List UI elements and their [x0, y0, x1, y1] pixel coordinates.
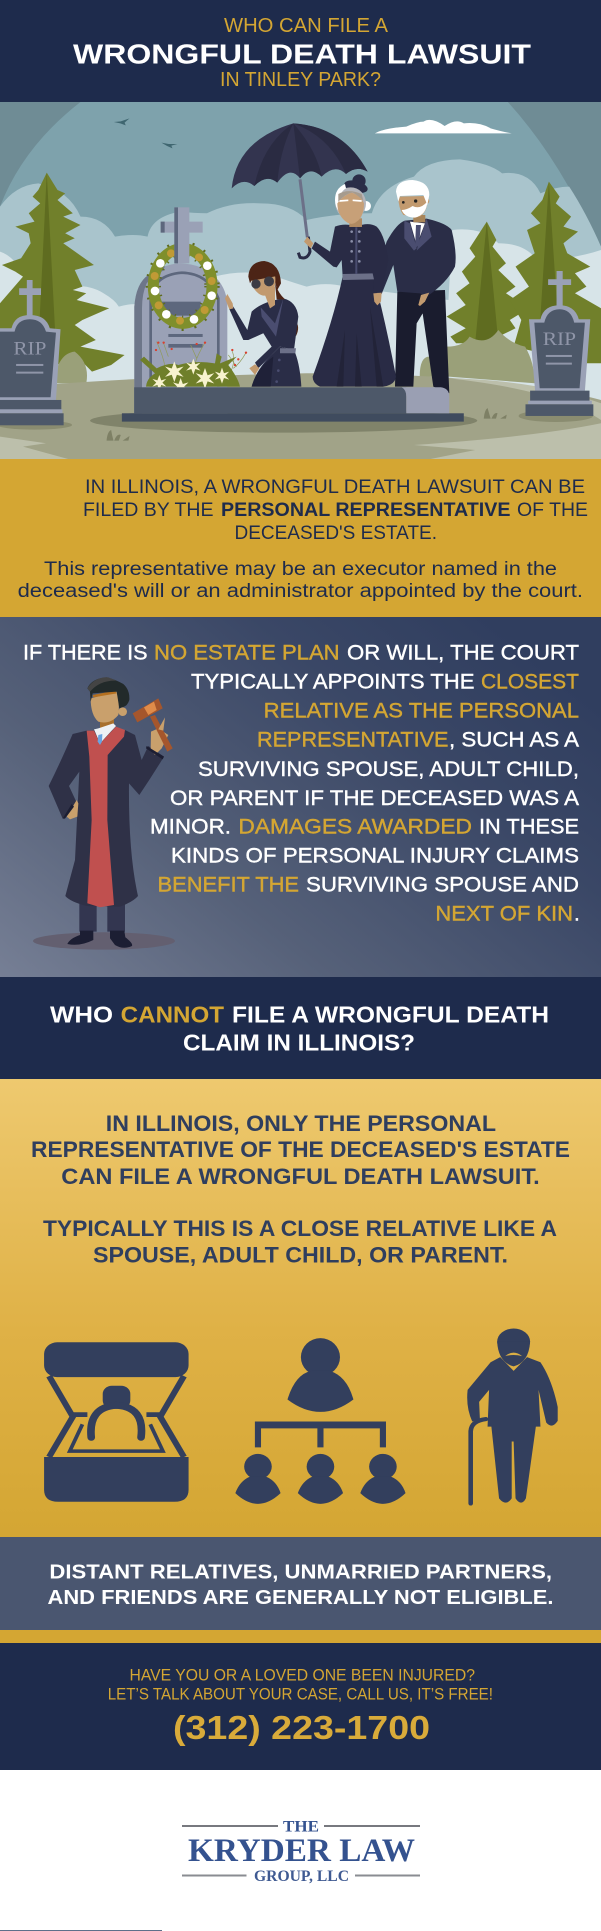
grave slab	[122, 387, 464, 422]
icon: judge with gavel	[33, 677, 175, 950]
left headstone: RIP	[13, 337, 46, 359]
body text: OR WILL, THE COURT	[347, 642, 579, 664]
panel: personal representative intro	[0, 459, 601, 617]
body text: NEXT OF KIN	[435, 902, 573, 925]
panel: header	[0, 0, 601, 102]
title line 2: WRONGFUL DEATH LAWSUIT	[73, 38, 531, 70]
not eligible text	[48, 1561, 554, 1609]
body text: CLOSEST	[481, 670, 579, 694]
ground	[0, 373, 601, 459]
umbrella	[232, 123, 368, 258]
body text: , SUCH AS A	[449, 729, 579, 752]
logo: The Kryder Law Group: KRYDER LAW	[188, 1833, 415, 1869]
elderly woman	[304, 174, 396, 387]
heading: FILE A WRONGFUL DEATH	[232, 1002, 549, 1028]
heading	[50, 1002, 549, 1056]
trees	[0, 173, 601, 372]
not eligible text: DISTANT RELATIVES, UNMARRIED PARTNERS,	[49, 1561, 552, 1584]
eligibility text: TYPICALLY THIS IS A CLOSE RELATIVE LIKE A	[43, 1216, 557, 1241]
icon: family tree	[235, 1338, 406, 1504]
bushes	[54, 330, 535, 383]
call to action text: HAVE YOU OR A LOVED ONE BEEN INJURED?	[130, 1667, 475, 1685]
body text: DAMAGES AWARDED	[238, 816, 472, 839]
call to action text: LET’S TALK ABOUT YOUR CASE, CALL US, IT’S FREE!	[108, 1685, 493, 1703]
body text: REPRESENTATIVE	[257, 729, 448, 752]
intro text: FILED BY THE	[83, 500, 214, 521]
intro text: DECEASED'S ESTATE.	[234, 523, 437, 544]
kneeling woman	[225, 261, 301, 387]
not eligible text: AND FRIENDS ARE GENERALLY NOT ELIGIBLE.	[48, 1586, 554, 1609]
representative explanation: deceased's will or an administrator appointed by the court.	[18, 581, 583, 602]
title line 1: WHO CAN FILE A	[224, 15, 389, 37]
eligibility text: REPRESENTATIVE OF THE DECEASED'S ESTATE	[31, 1137, 570, 1162]
body text: IN THESE	[479, 816, 579, 839]
cloud	[375, 120, 512, 133]
birds	[114, 118, 177, 148]
body text: SURVIVING SPOUSE AND	[306, 873, 579, 896]
shadows	[90, 409, 477, 433]
body text: TYPICALLY APPOINTS THE	[191, 670, 474, 694]
panel: only the personal representative	[0, 1079, 601, 1537]
eligibility text: SPOUSE, ADULT CHILD, OR PARENT.	[93, 1243, 508, 1268]
phone number: (312) 223-1700	[173, 1709, 430, 1746]
panel: not eligible	[0, 1537, 601, 1630]
intro text	[83, 477, 588, 544]
icons	[44, 1329, 558, 1504]
panel: who cannot file heading	[0, 977, 601, 1079]
icon: spouse ring box	[44, 1342, 189, 1502]
call to action text	[108, 1667, 493, 1703]
heading: CANNOT	[121, 1002, 224, 1028]
background landscape	[0, 102, 601, 459]
body text: BENEFIT THE	[158, 873, 299, 896]
logo: The Kryder Law Group	[182, 1819, 420, 1885]
intro text: IN ILLINOIS, A WRONGFUL DEATH LAWSUIT CAN BE	[85, 477, 585, 498]
body text: SURVIVING SPOUSE, ADULT CHILD,	[198, 758, 579, 781]
logo: The Kryder Law Group: THE	[283, 1819, 319, 1836]
body text: NO ESTATE PLAN	[154, 642, 340, 664]
right headstone: RIP	[543, 327, 576, 350]
eligibility text: CAN FILE A WRONGFUL DEATH LAWSUIT.	[61, 1164, 540, 1189]
intro text: PERSONAL REPRESENTATIVE	[221, 500, 510, 521]
eligibility text	[31, 1111, 570, 1268]
flowers	[140, 341, 247, 395]
body text: MINOR.	[150, 816, 231, 839]
representative explanation	[18, 559, 583, 602]
intro text: OF THE	[517, 500, 588, 521]
panel: call to action	[0, 1643, 601, 1770]
body text: IF THERE IS	[23, 642, 148, 664]
wreath	[151, 249, 216, 325]
left headstone	[0, 280, 64, 425]
panel: estate plan with judge	[0, 617, 601, 977]
heading: WHO	[50, 1002, 113, 1028]
body text: KINDS OF PERSONAL INJURY CLAIMS	[171, 845, 579, 868]
logo: The Kryder Law Group: GROUP, LLC	[254, 1868, 349, 1885]
icon: elderly parent with cane	[467, 1329, 558, 1503]
elderly man	[374, 180, 456, 393]
mourners	[225, 123, 456, 393]
cross	[161, 207, 203, 263]
eligibility text: IN ILLINOIS, ONLY THE PERSONAL	[106, 1111, 496, 1136]
body text: RELATIVE AS THE PERSONAL	[264, 700, 579, 723]
right headstone	[526, 271, 593, 416]
grass tufts	[107, 408, 507, 441]
body text: OR PARENT IF THE DECEASED WAS A	[170, 787, 579, 810]
body text: .	[574, 902, 580, 925]
central headstone with wreath and flowers	[134, 207, 247, 413]
body text	[23, 642, 580, 925]
heading: CLAIM IN ILLINOIS?	[183, 1030, 415, 1056]
title line 3: IN TINLEY PARK?	[220, 69, 381, 91]
representative explanation: This representative may be an executor named in the	[44, 559, 557, 580]
illustration: funeral scene at cemetery	[0, 102, 601, 459]
